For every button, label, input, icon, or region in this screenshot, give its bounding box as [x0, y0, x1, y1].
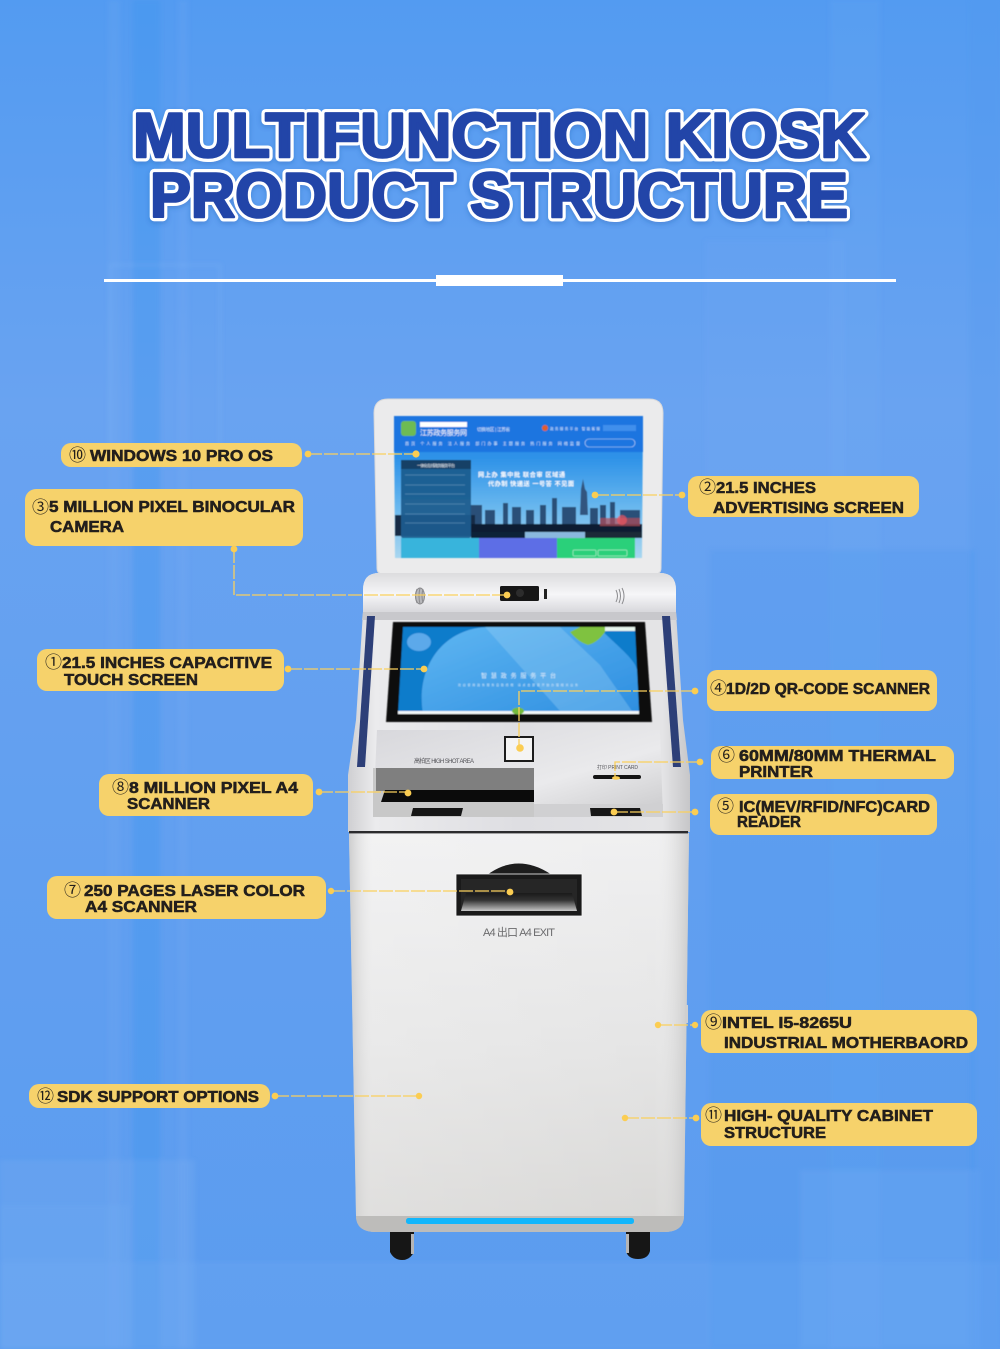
banner slogan: 代办制 快递送 一号答 不见面 [488, 480, 574, 488]
callout: laser color scanner: A4 SCANNER [85, 899, 197, 916]
advertising screen content: 首页 个人服务 法人服务 部门办事 主题服务 热门服务 网络监督 [405, 440, 580, 446]
document scanner recess [373, 768, 534, 817]
title outline layer [133, 101, 866, 231]
callout: cabinet structure: STRUCTURE [724, 1125, 826, 1142]
callout: laser color scanner: 250 PAGES LASER COLOR [84, 883, 305, 900]
advertising screen content [394, 416, 643, 558]
callout: QR-code scanner [516, 670, 937, 752]
title [133, 101, 866, 231]
callout: capacitive touch screen: 21.5 INCHES CAPACITIVE [62, 655, 272, 672]
advertising screen content: 切换地区 | 江苏省 [477, 426, 510, 433]
callout: advertising screen: 21.5 INCHES [716, 480, 816, 497]
touch screen: 智慧政务服务平台 [481, 672, 556, 680]
callout: A4 scanner [99, 773, 411, 816]
callout: thermal printer: PRINTER [739, 764, 813, 781]
callout: cabinet structure: HIGH- QUALITY CABINET [724, 1108, 934, 1125]
callout: motherboard [655, 1008, 977, 1053]
callout: thermal printer: 60MM/80MM THERMAL [739, 748, 936, 765]
callout: binocular camera: CAMERA [50, 519, 124, 536]
printer and card slots [590, 764, 642, 816]
callout: binocular camera [25, 489, 510, 598]
callout: motherboard: INTEL I5-8265U [722, 1015, 852, 1032]
callout: card reader [611, 792, 937, 835]
callout: cabinet structure: ⑪ [705, 1101, 722, 1126]
callout: advertising screen [592, 473, 919, 517]
service tiles [401, 538, 479, 558]
lower cabinet [349, 831, 689, 1232]
lower control panel [373, 730, 663, 817]
callout: SDK support [29, 1082, 422, 1108]
advertising screen content: 江苏政务服务网 [420, 428, 467, 437]
city skyline [395, 479, 642, 538]
left menu panel [401, 460, 471, 538]
callout: capacitive touch screen: TOUCH SCREEN [64, 672, 198, 689]
callout: capacitive touch screen: ① [45, 648, 62, 673]
callout: A4 scanner: SCANNER [127, 796, 210, 813]
callout: capacitive touch screen [37, 648, 427, 691]
callout: advertising screen: ② [699, 473, 716, 498]
QR scanner window [505, 737, 533, 761]
kiosk wheels [390, 1232, 650, 1260]
title divider rule [104, 275, 896, 286]
upper monitor housing [374, 399, 663, 574]
callout: motherboard: ⑨ [705, 1008, 722, 1033]
title fill layer: MULTIFUNCTION KIOSK [133, 101, 866, 171]
callout: windows 10 pro os: ⑩ [69, 441, 86, 466]
kiosk machine [348, 399, 690, 1260]
callout: card reader: ⑤ [717, 792, 734, 817]
touch screen: 欢迎使用政务服务自助终端 请点击屏幕开始办理相关业务 [458, 682, 578, 687]
printer and card slots: 打印 PRINT CARD [597, 764, 638, 771]
callout: cabinet structure [622, 1101, 977, 1146]
callout: thermal printer: ⑥ [718, 741, 735, 766]
speaker grille icons [416, 588, 624, 604]
A4 exit caption: A4 出口 A4 EXIT [483, 925, 555, 939]
title fill layer [133, 101, 866, 231]
callout: card reader: READER [737, 814, 801, 831]
callout: A4 scanner: ⑧ [112, 773, 129, 798]
callout: laser color scanner: ⑦ [64, 876, 81, 901]
kiosk main body [348, 573, 690, 832]
title fill layer: PRODUCT STRUCTURE [150, 161, 848, 231]
lower control panel: 高拍区 HIGH SHOT AREA [414, 757, 474, 765]
A4 exit slot [456, 864, 582, 916]
title outline layer: PRODUCT STRUCTURE [150, 161, 848, 231]
callout: windows 10 pro os: WINDOWS 10 PRO OS [90, 448, 273, 465]
callout: thermal printer [612, 741, 954, 781]
advertising screen content: 一体化在线政务服务平台 [417, 462, 455, 468]
banner slogan: 网上办 集中批 联合审 区域通 [478, 471, 566, 479]
callout: QR-code scanner: 1D/2D QR-CODE SCANNER [726, 681, 930, 698]
camera module [500, 586, 547, 601]
banner slogan [478, 471, 574, 488]
callout: motherboard: INDUSTRIAL MOTHERBAORD [724, 1035, 968, 1052]
title outline layer: MULTIFUNCTION KIOSK [133, 101, 866, 171]
touch screen [386, 622, 652, 722]
callout: SDK support: ⑫ [37, 1082, 54, 1107]
callout: laser color scanner [47, 876, 513, 919]
callout: advertising screen: ADVERTISING SCREEN [713, 500, 904, 517]
callout: binocular camera: ③ [32, 493, 49, 518]
callout: QR-code scanner: ④ [710, 674, 727, 699]
callout: card reader: IC(MEV/RFID/NFC)CARD [739, 799, 930, 816]
advertising screen content: 政务服务平台 智能客服 [550, 426, 600, 431]
cabinet LED light bar [406, 1218, 634, 1224]
callout: SDK support: SDK SUPPORT OPTIONS [57, 1089, 259, 1106]
side light strips [357, 616, 681, 767]
callout: binocular camera: 5 MILLION PIXEL BINOCULAR [49, 499, 295, 516]
callout: A4 scanner: 8 MILLION PIXEL A4 [129, 780, 298, 797]
callout: windows 10 pro os [61, 441, 420, 467]
